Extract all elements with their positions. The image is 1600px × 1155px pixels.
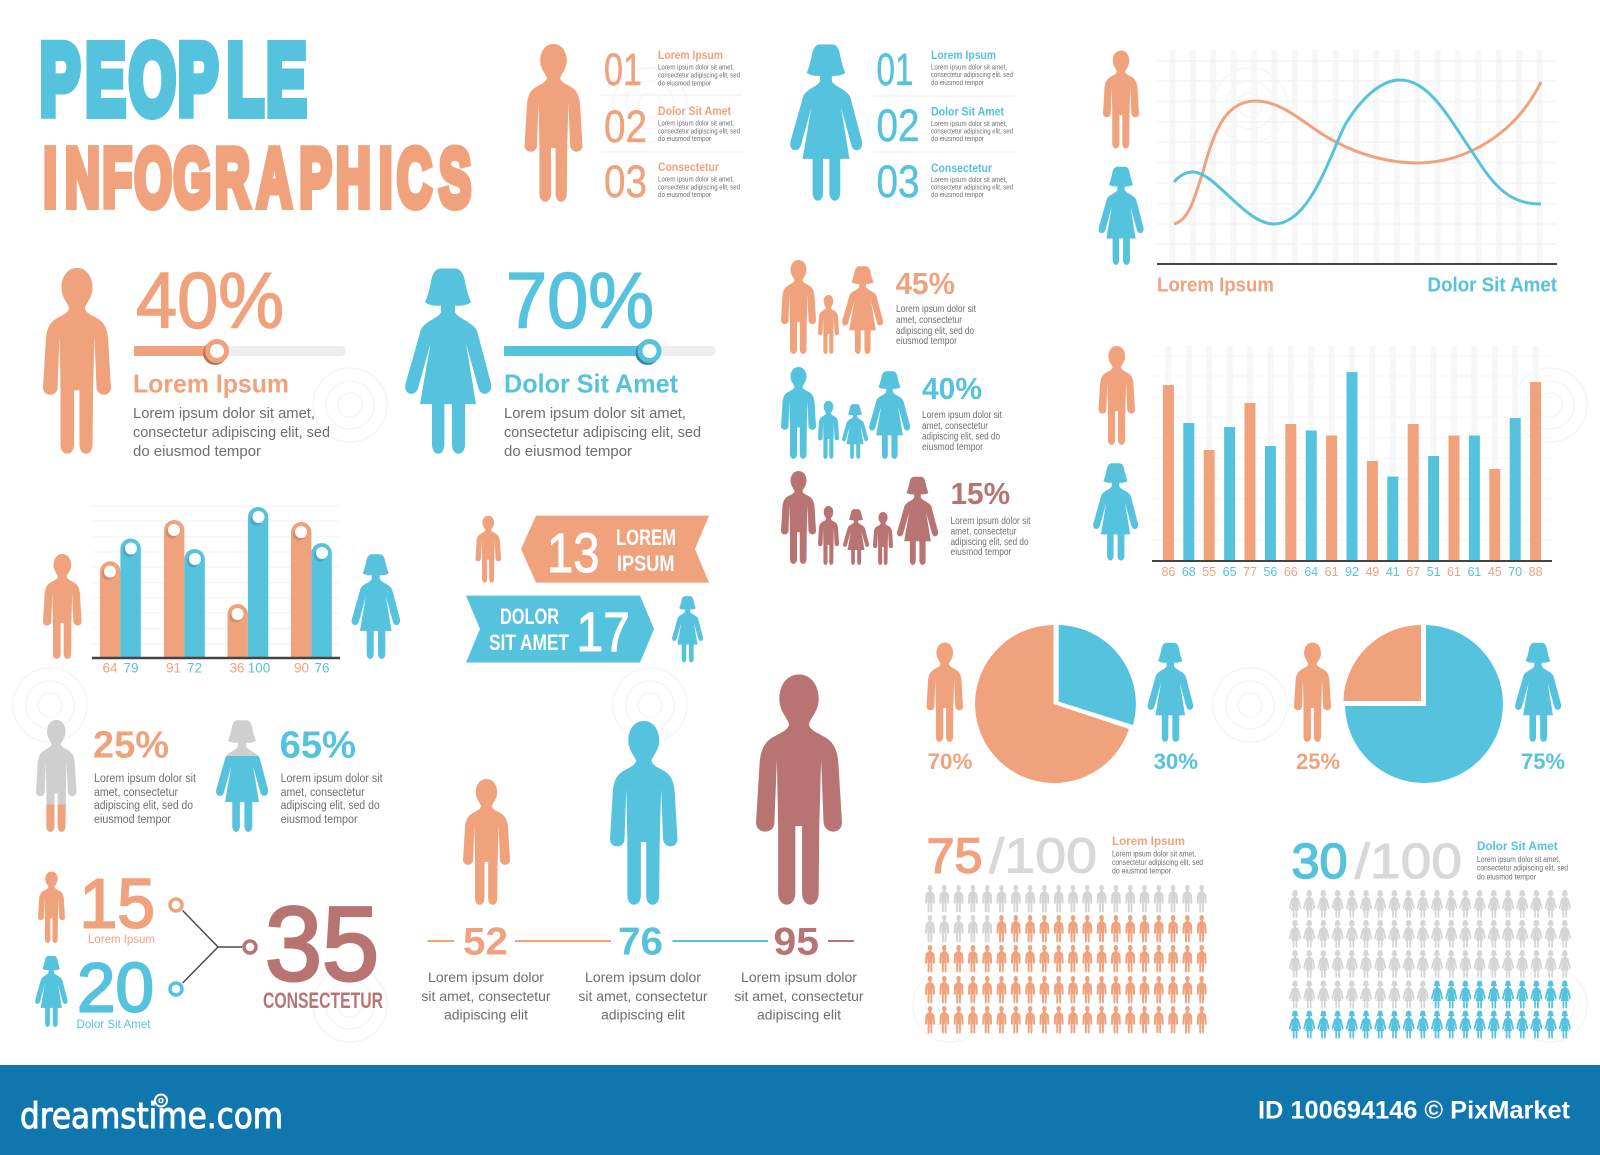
icon: man — [1103, 50, 1139, 148]
list text: Dolor Sit Amet — [931, 106, 1004, 118]
icon: small man — [476, 516, 501, 583]
description — [133, 406, 330, 460]
panel: pie 70 30 — [926, 625, 1198, 783]
description: consectetur adipiscing elit, sed — [133, 425, 330, 441]
bar values: 70 — [1508, 565, 1522, 579]
bar values: 64 — [1304, 565, 1318, 579]
value: 35: 35 — [265, 886, 379, 1003]
bar values: 86 — [1161, 565, 1175, 579]
description: adipiscing elit, sed do — [950, 536, 1029, 548]
list text: Consectetur — [931, 163, 992, 175]
legend: orange: Lorem Ipsum — [1157, 274, 1274, 296]
list text: Lorem Ipsum — [658, 50, 723, 62]
description: Lorem ipsum dolor sit — [94, 773, 197, 785]
panel: line chart — [1099, 50, 1557, 296]
label: 75 percent: 75% — [1521, 749, 1565, 774]
description: 76: adipiscing elit — [601, 1006, 685, 1022]
title — [40, 24, 471, 224]
description — [950, 515, 1031, 558]
bar values: 77 — [1243, 565, 1257, 579]
image id: ID 100694146 © PixMarket — [1258, 1096, 1571, 1124]
list text: do eiusmod tempor — [931, 78, 984, 87]
list numbers — [604, 44, 647, 207]
icon: man — [926, 642, 963, 742]
bar values: 61 — [1447, 565, 1461, 579]
label: lorem ipsum: Lorem Ipsum — [88, 932, 155, 946]
list text: Lorem ipsum dolor sit amet, — [931, 62, 1007, 72]
bar values: 55 — [1202, 565, 1216, 579]
value: 45% — [896, 266, 955, 301]
list numbers: 01 — [604, 44, 642, 95]
description: 95 — [734, 969, 864, 1022]
value: 70% — [506, 256, 654, 344]
description — [922, 409, 1002, 453]
label: 30 percent: 30% — [1154, 749, 1198, 774]
list text: do eiusmod tempor — [658, 190, 711, 199]
list numbers: 01 — [876, 44, 914, 95]
icon: man — [1098, 346, 1135, 445]
list text: Lorem ipsum dolor sit amet, — [931, 119, 1007, 128]
value: 25% — [93, 724, 169, 766]
description — [504, 406, 701, 460]
value: 15% — [950, 476, 1010, 511]
description — [1112, 850, 1203, 876]
description: amet, consectetur — [922, 420, 988, 432]
label: 25 percent: 25% — [1296, 749, 1340, 774]
description: 76: Lorem ipsum dolor — [585, 969, 701, 985]
description: adipiscing elit, sed do — [922, 430, 1000, 442]
bar values: 65 — [1223, 565, 1237, 579]
description: eiusmod tempor — [950, 546, 1012, 558]
list text: Lorem Ipsum — [931, 50, 996, 62]
list text — [874, 50, 1014, 199]
icons: family of three — [781, 260, 883, 354]
icon: woman — [405, 268, 491, 454]
description: amet, consectetur — [281, 787, 365, 799]
panel: family 15 percent — [781, 471, 1031, 565]
column values: 64 — [102, 660, 118, 676]
ribbon: blue — [466, 596, 654, 663]
connector — [170, 899, 256, 995]
description: eiusmod tempor — [896, 335, 957, 347]
ribbon: blue: 17 — [576, 600, 630, 663]
label: consectetur: CONSECTETUR — [263, 988, 383, 1013]
description: adipiscing elit, sed do — [896, 325, 974, 337]
list text: do eiusmod tempor — [658, 78, 711, 88]
description: Lorem ipsum dolor sit — [922, 409, 1002, 421]
value: 65% — [280, 724, 356, 766]
value: 30 — [1292, 835, 1348, 889]
list text: consectetur adipiscing elit, sed — [931, 182, 1013, 192]
description — [281, 773, 383, 826]
column values: 36 — [229, 660, 245, 676]
description: eiusmod tempor — [94, 814, 171, 826]
description: 52: sit amet, consectetur — [421, 988, 551, 1004]
icon: large brown man — [756, 674, 842, 905]
bar values — [1161, 565, 1543, 579]
description: 52: Lorem ipsum dolor — [428, 969, 544, 985]
list text: Dolor Sit Amet — [658, 106, 731, 118]
description: consectetur adipiscing elit, sed — [1112, 858, 1203, 867]
panel: family 40 percent — [781, 367, 1002, 459]
description: amet, consectetur — [950, 526, 1017, 538]
list text: consectetur adipiscing elit, sed — [658, 182, 740, 192]
description: 52: adipiscing elit — [444, 1006, 528, 1022]
description: do eiusmod tempor — [1477, 872, 1536, 882]
ribbon: blue: DOLOR — [500, 604, 559, 629]
description: Lorem ipsum dolor sit amet, — [504, 406, 686, 422]
label: dolor sit amet: Dolor Sit Amet — [76, 1017, 151, 1031]
footer band — [0, 1065, 1600, 1155]
panel: family 45 percent — [781, 260, 976, 354]
description: eiusmod tempor — [922, 441, 983, 453]
value: 40% — [922, 371, 982, 406]
panel: 70 percent — [405, 256, 716, 460]
column knobs — [104, 511, 328, 620]
panel: male numbered list — [524, 44, 742, 207]
panel: 25 percent — [36, 720, 197, 832]
bar values: 45 — [1488, 565, 1502, 579]
description: do eiusmod tempor — [133, 444, 261, 460]
bar values: 61 — [1467, 565, 1481, 579]
total: /100 — [1355, 835, 1462, 889]
bar values: 92 — [1345, 565, 1359, 579]
description: 76: sit amet, consectetur — [578, 988, 708, 1004]
description: 95: Lorem ipsum dolor — [741, 969, 857, 985]
panel: female numbered list — [790, 44, 1014, 207]
logo: dreamstime: dreamstime.com — [20, 1096, 283, 1137]
bar values: 51 — [1427, 565, 1441, 579]
panel: 40 percent — [43, 256, 346, 460]
panel: 75 of 100 — [925, 830, 1207, 1033]
ribbon: orange: IPSUM — [617, 551, 674, 576]
pie chart — [1343, 625, 1503, 783]
label: Lorem Ipsum — [133, 368, 289, 398]
bar values: 56 — [1263, 565, 1277, 579]
description: do eiusmod tempor — [1112, 866, 1171, 876]
list text — [600, 50, 742, 199]
list text: do eiusmod tempor — [931, 134, 984, 143]
label: Lorem Ipsum — [1112, 836, 1185, 848]
list text: Consectetur — [658, 162, 719, 174]
list text: Lorem ipsum dolor sit amet, — [658, 62, 734, 72]
panel: sum diagram — [35, 864, 383, 1031]
column values: 100 — [248, 660, 270, 676]
list text: Lorem ipsum dolor sit amet, — [658, 174, 734, 184]
pictogram grid — [1289, 890, 1571, 1039]
bar values: 68 — [1182, 565, 1196, 579]
slider — [504, 339, 716, 365]
list text: Lorem ipsum dolor sit amet, — [931, 175, 1007, 184]
icon: woman — [1515, 643, 1561, 742]
column values: 72 — [187, 660, 202, 676]
icon: man — [524, 44, 582, 202]
description: amet, consectetur — [896, 314, 962, 326]
panel: pie 25 75 — [1294, 625, 1565, 783]
label: 70 percent: 70% — [928, 749, 972, 774]
ribbon: orange: 13 — [547, 521, 600, 584]
description: eiusmod tempor — [281, 814, 358, 826]
description: adipiscing elit, sed do — [281, 800, 380, 812]
panel: column chart — [1093, 346, 1552, 579]
icon: partly filled man — [36, 720, 76, 832]
icon: small woman — [672, 596, 703, 662]
column values: 79 — [123, 660, 139, 676]
icon: man — [43, 554, 82, 659]
list text: Lorem ipsum dolor sit amet, — [658, 118, 734, 128]
description — [1477, 855, 1568, 882]
panel: 65 percent — [216, 720, 383, 832]
value: 95: 95 — [774, 920, 819, 964]
list text: consectetur adipiscing elit, sed — [658, 70, 740, 80]
icon: woman — [35, 956, 68, 1027]
icon: man — [1294, 642, 1331, 742]
description: Lorem ipsum dolor sit amet, — [1477, 855, 1560, 864]
bar values: 67 — [1406, 565, 1420, 579]
panel: 30 of 100 — [1289, 835, 1571, 1039]
icon: woman — [1093, 463, 1138, 560]
list text: do eiusmod tempor — [658, 134, 711, 143]
icon: woman — [790, 44, 862, 201]
description: Lorem ipsum dolor sit amet, — [133, 406, 315, 422]
label: Dolor Sit Amet — [504, 368, 678, 398]
bar values: 41 — [1386, 565, 1400, 579]
value: 40% — [136, 256, 284, 344]
list numbers: 03 — [876, 156, 920, 207]
icon: medium blue man — [610, 721, 678, 905]
value: 15: 15 — [80, 864, 155, 942]
column knob shadows — [102, 514, 326, 622]
panel: ribbons — [466, 516, 709, 663]
description: Lorem ipsum dolor sit — [281, 773, 383, 785]
description: Lorem ipsum dolor sit — [896, 303, 976, 315]
list text: consectetur adipiscing elit, sed — [658, 126, 740, 136]
pie chart — [975, 625, 1136, 783]
column values: 91 — [166, 660, 181, 676]
description — [896, 303, 976, 347]
value: 20: 20 — [77, 948, 154, 1026]
title: INFOGRAPHICS — [43, 133, 471, 224]
description: Lorem ipsum dolor sit — [950, 515, 1031, 527]
list text: consectetur adipiscing elit, sed — [931, 70, 1013, 79]
timeline — [428, 940, 854, 942]
description: amet, consectetur — [94, 787, 178, 799]
panel: rounded column chart — [43, 506, 400, 676]
icon: small orange man — [463, 779, 510, 905]
description: consectetur adipiscing elit, sed — [504, 425, 701, 441]
list text: do eiusmod tempor — [931, 190, 984, 199]
curve: blue series — [1174, 80, 1541, 224]
bar values: 49 — [1365, 565, 1379, 579]
icon: woman — [1099, 167, 1144, 265]
value: 76: 76 — [618, 920, 663, 964]
column values: 90 — [294, 660, 309, 676]
description: 76 — [578, 969, 708, 1022]
icon: woman — [352, 554, 400, 659]
total: /100 — [989, 830, 1097, 884]
legend: blue: Dolor Sit Amet — [1428, 274, 1557, 296]
columns — [100, 507, 332, 658]
ribbon: orange — [521, 516, 709, 584]
bar values: 66 — [1284, 565, 1298, 579]
description — [94, 773, 197, 826]
description: do eiusmod tempor — [504, 444, 632, 460]
slider — [134, 339, 346, 365]
list numbers — [876, 44, 920, 207]
description: Lorem ipsum dolor sit amet, — [1112, 850, 1196, 858]
icon: man — [38, 872, 65, 943]
description: 95: adipiscing elit — [757, 1006, 841, 1022]
label: Dolor Sit Amet — [1477, 841, 1558, 853]
value: 52: 52 — [463, 920, 508, 964]
list numbers: 02 — [604, 101, 647, 152]
description: adipiscing elit, sed do — [94, 800, 193, 812]
bars — [1163, 372, 1541, 560]
icons: family of four — [781, 367, 910, 459]
description: 95: sit amet, consectetur — [734, 988, 864, 1004]
icons: family of five — [781, 471, 938, 565]
list text: consectetur adipiscing elit, sed — [931, 126, 1013, 136]
column values: 76 — [314, 660, 330, 676]
column values — [102, 660, 330, 676]
list numbers: 03 — [604, 156, 647, 207]
panel: age timeline — [421, 674, 864, 1022]
value: 75 — [926, 830, 982, 884]
list numbers: 02 — [876, 100, 920, 151]
title: PEOPLE — [40, 24, 306, 136]
bar values: 61 — [1325, 565, 1339, 579]
ribbon: orange: LOREM — [616, 525, 676, 550]
description: consectetur adipiscing elit, sed — [1477, 864, 1568, 872]
icon: man — [43, 268, 111, 454]
bar values: 88 — [1529, 565, 1543, 579]
ribbon: blue: SIT AMET — [489, 630, 569, 655]
icon: woman — [1148, 643, 1193, 742]
curve: orange series — [1174, 82, 1541, 224]
icon: partly filled woman — [216, 720, 268, 832]
description: 52 — [421, 969, 551, 1022]
pictogram grid — [925, 885, 1207, 1033]
